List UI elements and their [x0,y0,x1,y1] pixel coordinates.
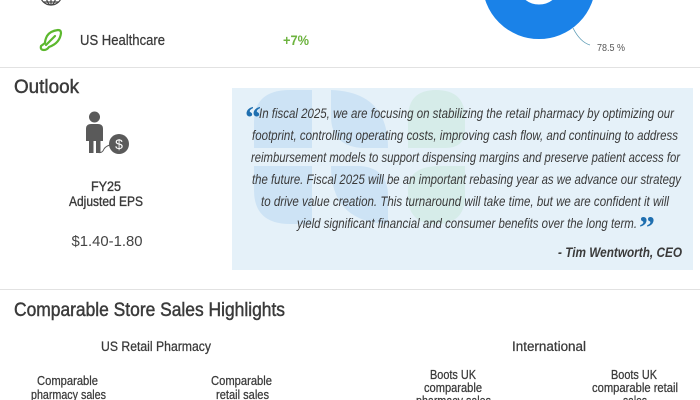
EPS value: $1.40-1.80 [72,233,142,250]
heading: Comparable Store Sales Highlights: Comparable Store Sales Highlights [14,299,285,321]
divider [0,289,700,290]
FY25 Adjusted EPS label [69,179,143,209]
label: Boots UK comparable pharmacy sales [416,368,491,400]
subheading: International: International [512,339,586,354]
label: Boots UK comparable retail sales [592,368,678,400]
icon: globe (cropped) [40,0,62,5]
heading: Outlook: Outlook [14,76,79,98]
donut label: 78.5 % [597,42,625,54]
label: comparable retail sales [211,374,272,400]
leader line [573,28,590,45]
closing quote mark: ” [639,209,655,245]
label: comparable pharmacy sales [31,374,106,400]
decorative leaf shapes [254,90,465,224]
quote text: yield significant financial and consumer benefits over the long term. [296,216,637,231]
value: US Healthcare growth: +7% [283,32,309,48]
opening quote mark: “ [245,99,261,135]
label: US Healthcare: US Healthcare [80,33,165,49]
icon: person with dollar coin [86,112,129,154]
label: Boots UK comparable pharmacy sales: comparable [424,381,482,395]
divider [0,67,700,68]
panel: CEO quote [232,88,693,270]
label: comparable pharmacy sales: Comparable [37,374,98,388]
label: comparable retail sales: Comparable [211,374,272,388]
icon: thermometer leaf [41,30,61,50]
quote text [251,106,682,231]
label: Boots UK comparable retail sales: Boots UK [611,368,658,382]
label: Boots UK comparable pharmacy sales: Boots UK [430,368,477,382]
donut chart [500,0,625,54]
subheading: US Retail Pharmacy: US Retail Pharmacy [101,339,211,354]
FY25 Adjusted EPS label: Adjusted EPS [69,194,143,209]
FY25 Adjusted EPS label: FY25 [91,179,121,194]
label: Boots UK comparable retail sales: comparable retail [592,381,678,395]
icon: person with dollar coin: $ [115,136,123,152]
